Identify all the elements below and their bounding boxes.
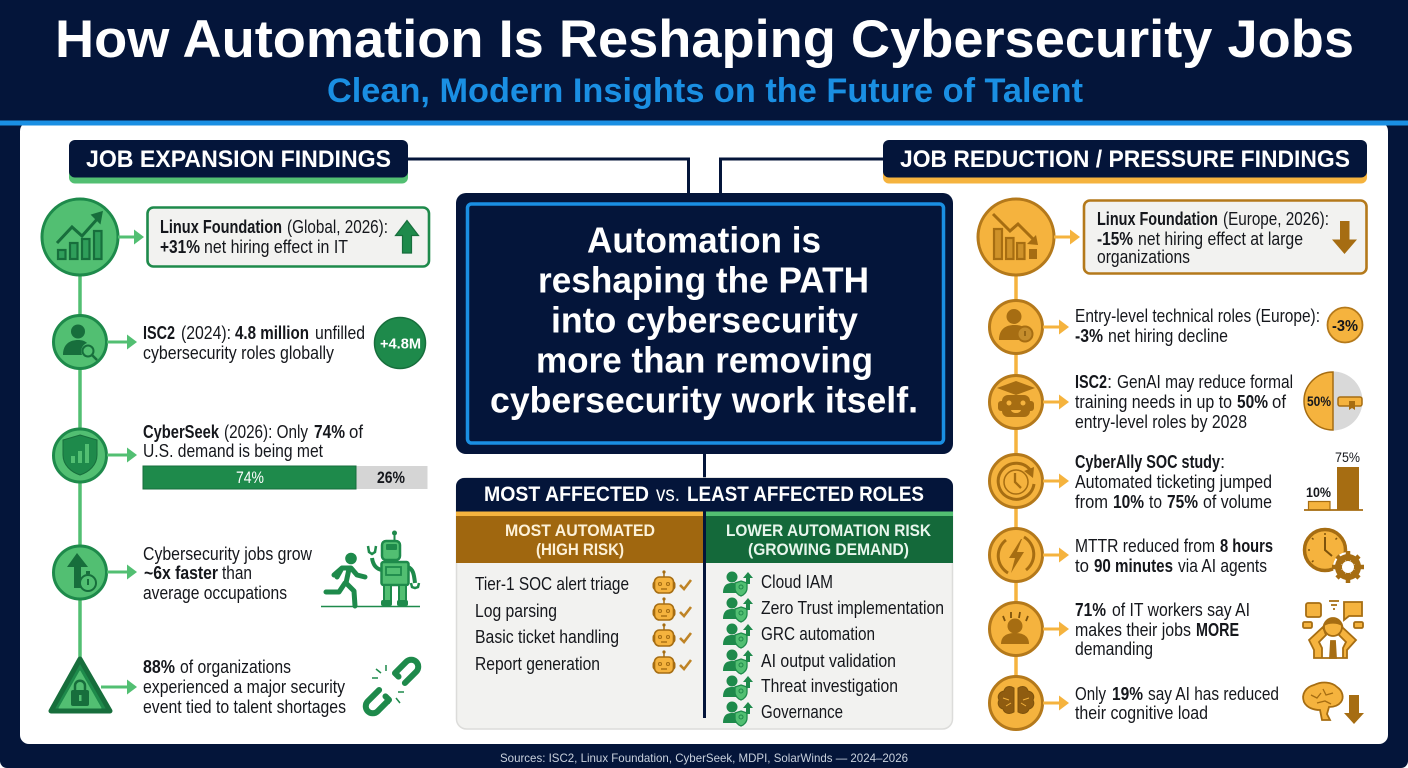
- icon: lightning cycle: [990, 528, 1042, 582]
- arrow: [107, 448, 137, 462]
- text: 19%: [1112, 683, 1143, 704]
- center message box: [456, 193, 953, 454]
- text: (2026): Only: [224, 421, 309, 442]
- finding: Linux Foundation global: [42, 199, 429, 275]
- text: training needs in up to: [1075, 391, 1232, 412]
- text: Linux Foundation: [160, 216, 282, 237]
- center message box: more than removing: [536, 340, 873, 380]
- text: [1075, 371, 1293, 432]
- bar chart: 10% to 75%: 75%: [1335, 449, 1360, 465]
- icon: brain: [990, 676, 1042, 730]
- icon: brain with down arrow: [1303, 683, 1364, 724]
- sources footer: Sources: ISC2, Linux Foundation, CyberSeek, MDPI, SolarWinds — 2024–2026: [500, 751, 908, 765]
- arrow: [118, 230, 144, 244]
- pie chart: 50%: 50%: [1307, 394, 1331, 409]
- text: of: [1272, 391, 1287, 412]
- table heading: vs.: [656, 483, 680, 506]
- center message box: reshaping the PATH: [538, 260, 869, 300]
- text: (Europe, 2026):: [1223, 208, 1329, 229]
- column header: lower automation risk: LOWER AUTOMATION RISK: [726, 521, 932, 540]
- connector lines to center box: [405, 159, 886, 480]
- heading: job expansion findings: JOB EXPANSION FINDINGS: [86, 146, 391, 173]
- badge: -3%: -3%: [1332, 318, 1358, 335]
- column header: most automated: [456, 512, 704, 563]
- finding: MTTR: [990, 528, 1364, 583]
- text: MORE: [1196, 619, 1239, 640]
- pie chart: 50%: [1304, 372, 1362, 430]
- icon: clock cycle: [990, 454, 1042, 508]
- icon: stressed person: [990, 602, 1042, 656]
- text: :: [1220, 451, 1225, 472]
- icon: person search: [54, 316, 106, 368]
- icon: growth chart: [42, 199, 118, 275]
- text: their cognitive load: [1075, 702, 1208, 723]
- text: 88%: [143, 656, 175, 677]
- icon: broken chain: [363, 657, 421, 716]
- text: than: [222, 562, 252, 583]
- center message box: Automation is: [587, 220, 821, 260]
- text: [1075, 451, 1272, 512]
- arrow: [1043, 696, 1069, 710]
- icon: clock and gear: [1304, 530, 1364, 583]
- subtitle: Clean, Modern Insights on the Future of Talent: [327, 72, 1083, 110]
- text: [1097, 208, 1329, 267]
- panel: most vs least affected roles: [456, 478, 953, 729]
- list: lower risk roles: [723, 571, 944, 726]
- bar chart: 74% vs 26%: 74%: [236, 468, 264, 487]
- icon: shield chart: [54, 429, 106, 482]
- icon: human racing robot: [321, 530, 420, 606]
- list: most automated roles: Tier-1 SOC alert triage: [475, 573, 629, 594]
- text: U.S. demand is being met: [143, 440, 323, 461]
- text: [143, 656, 346, 717]
- callout box: [1084, 200, 1366, 274]
- icon: arrow and stopwatch: [54, 546, 106, 599]
- text: [143, 421, 364, 461]
- text: average occupations: [143, 582, 287, 603]
- icon: down arrow: [1332, 221, 1357, 254]
- table heading: LEAST AFFECTED ROLES: [687, 483, 924, 506]
- text: ISC2: [143, 322, 175, 343]
- text: ISC2: [1075, 371, 1107, 392]
- text: :: [1107, 371, 1112, 392]
- text: 8 hours: [1220, 535, 1273, 556]
- finding: CyberAlly SOC: [990, 449, 1363, 512]
- bar chart: 10% to 75%: 10%: [1306, 484, 1331, 500]
- amber timeline: [1014, 270, 1018, 680]
- arrow: [1054, 230, 1080, 244]
- text: 10%: [1113, 491, 1144, 512]
- text: via AI agents: [1178, 555, 1267, 576]
- text: (2024):: [181, 322, 231, 343]
- list: lower risk roles: Zero Trust implementation: [761, 597, 944, 618]
- text: organizations: [1097, 246, 1190, 267]
- text: [160, 216, 388, 257]
- bar chart: 74% vs 26%: [143, 466, 428, 489]
- center message box: into cybersecurity: [551, 300, 858, 340]
- text: +31%: [160, 236, 200, 257]
- text: event tied to talent shortages: [143, 696, 346, 717]
- text: entry-level roles by 2028: [1075, 411, 1247, 432]
- text: net hiring effect in IT: [204, 236, 348, 257]
- finding: entry-level roles: [990, 300, 1362, 354]
- text: CyberAlly SOC study: [1075, 451, 1221, 472]
- panel: job reduction findings: [883, 140, 1367, 730]
- icon: person with coin: [990, 300, 1042, 354]
- text: [1075, 305, 1320, 346]
- finding: ISC2 GenAI: [990, 371, 1362, 432]
- text: Cybersecurity jobs grow: [143, 543, 313, 564]
- text: of IT workers say AI: [1112, 599, 1250, 620]
- finding: ISC2 4.8 million: [54, 316, 426, 368]
- text: CyberSeek: [143, 421, 220, 442]
- table heading: [456, 478, 953, 512]
- icon: declining chart: [978, 199, 1054, 275]
- list: lower risk roles: AI output validation: [761, 650, 896, 671]
- text: net hiring decline: [1108, 325, 1228, 346]
- text: experienced a major security: [143, 676, 346, 697]
- icon: warning triangle lock: [51, 659, 110, 711]
- center message box: cybersecurity work itself.: [490, 380, 918, 420]
- text: [1075, 683, 1279, 723]
- column header: most automated: MOST AUTOMATED: [505, 521, 655, 540]
- column header: lower automation risk: (GROWING DEMAND): [748, 540, 909, 559]
- text: 4.8 million: [235, 322, 309, 343]
- text: of: [349, 421, 364, 442]
- text: to: [1075, 555, 1089, 576]
- text: 50%: [1237, 391, 1268, 412]
- icon: up arrow: [396, 220, 418, 253]
- arrow: [1043, 394, 1069, 410]
- text: [1075, 599, 1250, 659]
- text: Entry-level technical roles (Europe):: [1075, 305, 1320, 326]
- list: most automated roles: Basic ticket handling: [475, 626, 619, 647]
- finding: CyberSeek: [54, 421, 428, 489]
- text: net hiring effect at large: [1138, 228, 1303, 249]
- badge: +4.8M: [374, 318, 426, 368]
- green timeline: [78, 270, 82, 665]
- bar chart: 10% to 75%: [1304, 449, 1363, 510]
- heading: job expansion findings: [69, 140, 408, 184]
- column header: lower automation risk: [704, 512, 953, 563]
- list: lower risk roles: Threat investigation: [761, 675, 898, 696]
- text: 71%: [1075, 599, 1106, 620]
- text: makes their jobs: [1075, 619, 1191, 640]
- text: demanding: [1075, 638, 1153, 659]
- text: 75%: [1167, 491, 1198, 512]
- text: unfilled: [315, 322, 365, 343]
- text: Automated ticketing jumped: [1075, 471, 1272, 492]
- finding: 71% of IT workers: [990, 599, 1363, 659]
- text: -3%: [1075, 325, 1103, 346]
- heading: job reduction / pressure findings: [883, 140, 1367, 184]
- callout box: [148, 208, 429, 266]
- arrow: [1043, 548, 1069, 562]
- badge: +4.8M: +4.8M: [380, 336, 421, 352]
- arrow: [101, 680, 137, 694]
- text: -15%: [1097, 228, 1133, 249]
- heading: job reduction / pressure findings: JOB REDUCTION / PRESSURE FINDINGS: [900, 146, 1350, 173]
- text: [1075, 535, 1273, 576]
- text: GenAI may reduce formal: [1117, 371, 1293, 392]
- arrow: [107, 564, 137, 580]
- list: lower risk roles: GRC automation: [761, 623, 875, 644]
- text: cybersecurity roles globally: [143, 342, 335, 363]
- header band: [0, 0, 1408, 126]
- column header: most automated: (HIGH RISK): [536, 540, 624, 559]
- text: 90 minutes: [1094, 555, 1173, 576]
- arrow: [1043, 622, 1069, 636]
- text: Linux Foundation: [1097, 208, 1218, 229]
- arrow: [1043, 474, 1069, 488]
- list: lower risk roles: Cloud IAM: [761, 571, 833, 592]
- table heading: MOST AFFECTED: [484, 483, 649, 506]
- text: Only: [1075, 683, 1107, 704]
- column divider: [703, 511, 706, 718]
- icon: overwhelmed worker: [1303, 601, 1363, 658]
- badge: -3%: [1328, 308, 1362, 342]
- arrow: [107, 334, 137, 350]
- finding: Linux Foundation Europe: [978, 199, 1366, 275]
- text: of organizations: [180, 656, 291, 677]
- list: most automated roles: Report generation: [475, 653, 600, 674]
- text: to: [1149, 491, 1162, 512]
- text: MTTR reduced from: [1075, 535, 1215, 556]
- text: say AI has reduced: [1148, 683, 1279, 704]
- arrow: [1043, 320, 1069, 334]
- text: ~6x faster: [144, 562, 218, 583]
- text: [143, 543, 313, 603]
- finding: 88% of organizations: [51, 656, 421, 717]
- text: from: [1075, 491, 1108, 512]
- finding: 19% cognitive load: [990, 676, 1364, 730]
- list: most automated roles: Log parsing: [475, 600, 557, 621]
- text: [143, 322, 365, 363]
- list: most automated roles: [475, 570, 691, 674]
- main white panel: [20, 122, 1388, 744]
- panel: job expansion findings: [42, 140, 1367, 765]
- finding: 6x faster: [54, 530, 420, 606]
- list: lower risk roles: Governance: [761, 701, 843, 722]
- icon: graduate robot: [990, 376, 1042, 428]
- text: of volume: [1203, 491, 1272, 512]
- text: (Global, 2026):: [287, 216, 388, 237]
- text: 74%: [314, 421, 345, 442]
- title: How Automation Is Reshaping Cybersecurity Jobs: [55, 10, 1354, 69]
- bar chart: 74% vs 26%: 26%: [377, 468, 405, 487]
